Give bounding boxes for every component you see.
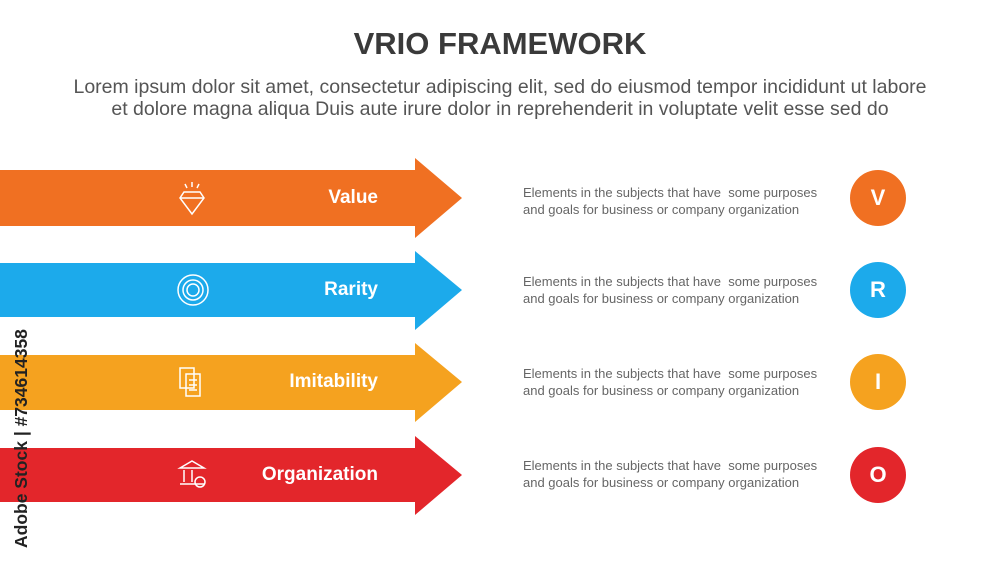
circle R bbox=[850, 262, 906, 318]
icon: documents bbox=[180, 368, 200, 396]
description 4: Elements in the subjects that have some purposes bbox=[523, 458, 817, 473]
arrow: rarity bbox=[0, 251, 462, 330]
description 3: Elements in the subjects that have some purposes bbox=[523, 366, 817, 381]
description 2 bbox=[523, 274, 817, 306]
subtitle: Lorem ipsum dolor sit amet, consectetur adipiscing elit, sed do eiusmod tempor incididunt ut labore bbox=[73, 76, 927, 98]
arrow: organization bbox=[0, 436, 462, 515]
circle O bbox=[850, 447, 906, 503]
icon: coin bbox=[178, 275, 208, 305]
description 1 bbox=[523, 185, 817, 217]
subtitle: et dolore magna aliqua Duis aute irure dolor in reprehenderit in voluptate velit esse sed do bbox=[111, 98, 889, 120]
label: Imitability: Imitability bbox=[289, 371, 378, 392]
description 3 bbox=[523, 366, 817, 398]
label: Rarity: Rarity bbox=[324, 279, 378, 300]
title: VRIO FRAMEWORK bbox=[354, 26, 646, 61]
subtitle bbox=[73, 76, 927, 120]
description 4 bbox=[523, 458, 817, 490]
arrow: imitability bbox=[0, 343, 462, 422]
circle O: O bbox=[869, 462, 887, 487]
icon: building bbox=[180, 461, 205, 487]
description 3: and goals for business or company organization bbox=[523, 383, 799, 398]
description 2: and goals for business or company organization bbox=[523, 291, 799, 306]
icon: diamond bbox=[180, 182, 204, 214]
circle V: V bbox=[871, 185, 885, 210]
description 2: Elements in the subjects that have some purposes bbox=[523, 274, 817, 289]
description 1: and goals for business or company organization bbox=[523, 202, 799, 217]
circle I bbox=[850, 354, 906, 410]
watermark id: Adobe Stock | #734614358 bbox=[11, 329, 31, 548]
arrows bbox=[0, 158, 462, 515]
circle R: R bbox=[870, 277, 886, 302]
description 4: and goals for business or company organization bbox=[523, 475, 799, 490]
label: Organization: Organization bbox=[262, 464, 378, 485]
circle V bbox=[850, 170, 906, 226]
label: Value: Value bbox=[328, 187, 378, 208]
description 1: Elements in the subjects that have some purposes bbox=[523, 185, 817, 200]
arrow: value bbox=[0, 158, 462, 238]
circle I: I bbox=[875, 369, 881, 394]
